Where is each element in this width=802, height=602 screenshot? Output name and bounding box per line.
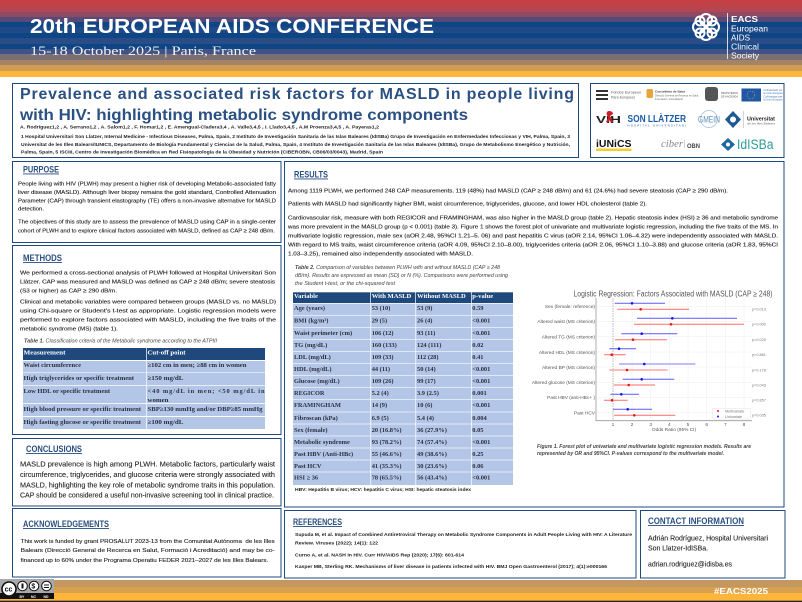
reference list: Kasper MB, Sterling RK. Mechanisms of liver disease in patients infected with HIV. BMJ Open Gastroenterol (2017); 4(1):e000166 [295,564,607,569]
p-values: p=0.013 [752,308,766,312]
methods text: metabolic syndrome (MS) (table 1). [20,326,118,332]
heading: conclusions: CONCLUSIONS [26,444,82,454]
table 2: comparison of variables: <0.001 [472,330,490,337]
x axis ticks and label: Odds Ratio (95% CI) [652,427,697,433]
table 2: comparison of variables: REGICOR [294,390,325,397]
table 1: metabolic syndrome criteria: High triglycerides or specific treatment [24,375,135,382]
table 2: comparison of variables: 106 (12) [372,330,394,337]
table 2: comparison of variables: 49 (38.6%) [417,451,447,458]
table 2: comparison of variables: 74 (57.4%) [417,439,447,446]
results text: 1.03–3.25), remained also independently associated with MASLD. [288,252,473,258]
conclusions text: MASLD prevalence is high among PLWH. Metabolic factors, particularly waist [20,460,275,468]
EACS society name: Society [731,50,760,60]
logo: Son Llatzer [628,112,687,128]
affiliations [21,134,570,154]
methods text: We performed a cross-sectional analysis of PLWH followed at Hospital Universitari Son [20,270,276,276]
table 1: metabolic syndrome criteria [23,348,265,429]
table 1 caption: Table 1. Classification criteria of the Metabolic syndrome according to the ATPIII [24,338,217,344]
poster title [19,86,574,124]
table 1: metabolic syndrome criteria: ≥100 mg/dL [148,419,184,426]
table 2: comparison of variables: <0.001 [472,439,490,446]
footer banner [0,579,802,602]
table 2: comparison of variables: With MASLD [372,293,412,300]
heading: purpose: PURPOSE [23,164,59,174]
logo: Ministerio de Hacienda: DE HACIENDA [721,94,738,98]
table 2: comparison of variables: 109 (33) [372,354,394,361]
table 2: comparison of variables: <0.001 [472,378,490,385]
icon: creative commons licence badge [0,579,54,599]
reference list: Curno A, et al. NASH in HIV. Curr HIV/AIDS Rep (2020); 17(6): 601-614 [295,552,464,558]
category labels: Altered waist (MS criterion) [537,319,595,325]
logo: Son Llatzer: SON LLÀTZER [628,112,687,125]
table 2: comparison of variables: Variable [294,293,318,300]
chart: forest plot of logistic regression [532,290,773,433]
table 2: comparison of variables: 53 (10) [372,305,390,312]
acknowledgements text: Balears (Direcció General de Recerca en Salut, Formació i Acreditació) and may be co- [21,548,275,554]
x axis ticks and label: 4 [668,422,671,428]
table 2: comparison of variables: Past HCV [294,463,322,470]
table 2: comparison of variables: 99 (17) [417,378,436,385]
table 2: comparison of variables: 93 (11) [417,330,435,337]
affiliations: Palma, Spain, 5 ISCIII, Centro de Investigación Biomédica en Red Fisiopatología de la Obesidad y Nutrición (CIBEROBN, CB06/03/0043), Madrid, Spain [21,149,383,154]
table 2: comparison of variables: 0.001 [472,390,487,397]
poster title: Prevalence and associated risk factors for MASLD in people living [20,86,574,103]
table 2: comparison of variables: 6.9 (5) [372,415,389,422]
logo: EU flag: Cofinanciado por [764,88,783,92]
purpose text: Parameter (CAP) through transient elastography (TE) offers a non-invasive alternative for MASLD [18,198,276,204]
table 2 caption: dB/m). Results are expressed as mean (SD) or N (%). Comparisons were performed using [295,273,509,279]
x axis ticks and label: 6 [705,422,708,428]
panel: acknowledgements [12,508,281,577]
logo: CIBER OBN: ciber [661,139,683,150]
table 1: metabolic syndrome criteria: women [148,397,169,404]
p-values: p=0.857 [752,398,766,402]
results text: Cardiovascular risk, measure with both REGICOR and FRAMINGHAM, was also higher in the MASLD group (table 2). Hepatic steatosis index (HSI) ≥ 36 and metabolic syndrome [288,216,779,222]
table 2: comparison of variables: Past HBV (Anti-HBc) [294,451,353,458]
chart legend: Univariate [725,415,742,419]
table 2: comparison of variables: 0.05 [472,427,483,434]
EACS society name [727,13,768,60]
EACS society name: EACS [731,14,758,24]
table 2: comparison of variables: 0.06 [472,463,484,470]
affiliations: 1 Hospital Universitari Son Llatzer, Internal Medicine - Infectious Diseases, Palma, Spain, 2 Instituto de Investigación Sanitaria de las Islas Baleares (IdISBa) Grupo de Investigación en Enfermedades Infecciosas y VIH, Palma, Spain, 3 [21,134,570,139]
table 2 caption: Table 2. Comparison of variables between PLWH with and without MASLD (CAP ≥ 248 [295,265,501,271]
contact text: Son Llatzer-IdISBa. [648,544,708,552]
purpose text: liver disease (MASLD). Although liver biopsy remains the gold standard, Controlled Attenuation [18,190,276,196]
table 2 caption: the Student t-test, or the chi-squared test [295,281,395,287]
results text: was more prevalent in the MASLD group (p < 0.001) (table 3). Figure 1 shows the forest plot of univariate and multivariate logistic regression, including the five traits of the MS. In [287,225,778,231]
authors: A. Rodríguez1,2 , A. Serrano1,2 , A. Salom1,2 , F. Homar1,2 , E. Amengual-Cladera3,4 , A. Valle3,4,5 , I. Llado3,4,5 , A.M Proenza3,4,5 , A. Payeras1,2 [20,124,379,130]
table 1: metabolic syndrome criteria: ≥102 cm in men; ≥88 cm in women [148,362,247,369]
table 1: metabolic syndrome criteria: <40 mg/dL in men; <50 mg/dL in [148,388,265,395]
icon: EACS knot logo [693,14,719,40]
panel: funder and institution logos [590,84,784,158]
logo: Universitat de les Illes Balears: Universitat [747,116,775,122]
x axis ticks and label: 1 [612,422,615,428]
chart legend: Multivariate [725,410,744,414]
logo: IdISBa: IdISBa [737,137,774,152]
category labels: Past HBV (anti-HBc+ ) [547,395,595,401]
table 2: comparison of variables: 5.2 (4) [372,390,389,397]
conference date and place: 15-18 October 2025 | Paris, France [30,43,256,58]
table 2: comparison of variables: 112 (28) [417,354,438,361]
table 2: comparison of variables: 0.004 [472,415,487,422]
purpose text: detection. [18,207,44,213]
p-values [752,308,766,418]
category labels: Altered BP (MS criterion) [542,365,595,371]
logo: Conselleria de Salut: Formació i Acreditació [655,97,683,101]
table 2: comparison of variables: 0.59 [472,305,483,312]
reference list: Supuda M, et al. Impact of Combined Antiretroviral Therapy on Metabolic Syndrome Components in Adult People Living with HIV: A Literature [295,532,632,537]
results text: With regard to MS traits, waist circumference criteria (aOR 4.09, 95%CI 2.10–8.00), triglycerides criteria (aOR 2.06, 95%CI 1.10–3.88) and glucose criteria (aOR 1.83, 95%CI [288,243,778,249]
table 1: metabolic syndrome criteria: High blood pressure or specific treatment [24,406,142,413]
table 2: comparison of variables: <0.001 [472,318,490,325]
logo: EU flag: la Unió Europea [764,98,783,102]
p-values: p=0.178 [752,368,766,372]
table 2: comparison of variables: p-value [472,293,493,300]
icon: creative commons licence badge: ND [44,595,49,599]
results text: multivariate logistic regression, male sex (aOR 2.48, 95%CI 1.21–5. 06) and past hepatitis C virus (aOR 2.14, 95%CI 1.06–4.32) were independently associated with MASLD. [288,234,778,240]
purpose text: People living with HIV (PLWH) may present a higher risk of developing Metabolic-associated fatty [18,181,276,187]
table 2: comparison of variables: 0.02 [472,342,483,349]
logo: iUNICS: iUNiCS [596,139,632,150]
logo: Conselleria de Salut: Conselleria de Salut [655,90,685,94]
univariate intervals [609,302,737,411]
table 2: comparison of variables: 78 (65.5%) [372,475,402,482]
purpose text: The objectives of this study are to assess the prevalence of MASLD using CAP in a single-center [18,220,276,226]
affiliations: Universitat de les Illes Balears/IUNICS, Departamento de Biología Fundamental y Ciencias de la Salud, Palma, Spain, 4 Instituto de Investigación Sanitaria de las Islas Baleares (IdISBa), Grupo de Metabolismo Energético y Nutrición, [21,142,570,147]
reference list: Review. Viruses (2022); 14(1): 122 [295,540,378,546]
table 2: comparison of variables: 56 (43.4%) [417,475,447,482]
logo: Universitat de les Illes Balears [725,111,776,128]
table 1: metabolic syndrome criteria: SBP≥130 mmHg and/or DBP≥85 mmHg [148,406,263,413]
x axis ticks and label: 5 [687,422,690,428]
logo: EU flag [742,88,783,102]
methods text [20,270,277,332]
category labels: Sex (female: reference) [545,304,595,310]
icon: creative commons licence badge: NC [31,595,36,599]
category labels: Altered glucose (MS criterion) [532,380,595,386]
logo: EU flag: la Unión Europea [764,91,783,95]
figure 1 caption: Figure 1. Forest plot of univariate and multivariate logistic regression models. Results are [537,444,751,450]
logo: VIH [596,111,621,126]
table 2: comparison of variables: Waist perimeter (cm) [294,330,352,337]
figure 1 caption [537,444,751,457]
acknowledgements text: financed up to 60% under the Programa Operatiu FEDER 2021–2027 de les Illes Balears. [21,558,269,564]
chart title: Logistic Regression: Factors Associated with MASLD (CAP ≥ 248) [574,290,773,298]
EACS society name: AIDS [731,32,750,42]
panel: contact information [640,510,785,578]
logo: Fondos Europeos [596,90,641,100]
p-values: p=0.881 [752,353,766,357]
logo: Fondos Europeos: Para Europeos [611,96,635,100]
category labels: Altered HDL (MS criterion) [539,350,595,356]
logo: Conselleria de Salut [646,89,699,101]
table 2 caption [295,265,509,287]
contact text [648,534,768,568]
table 2: comparison of variables: 0.25 [472,451,483,458]
logo: Fondos Europeos: Fondos Europeos [611,90,641,94]
figure 1 caption: represented by OR and 95%CI. P-values correspond to the multivariate model. [537,451,724,457]
p-values: p=0.025 [752,338,766,342]
logo: CIBER OBN: OBN [687,143,700,150]
table 2: comparison of variables: 41 (35.3%) [372,463,402,470]
x axis ticks and label: 8 [743,422,746,428]
table 2: comparison of variables: 53 (9) [417,305,432,312]
category labels: Past HCV [574,410,596,416]
methods text: Llàtzer. CAP was measured and MASLD was defined as CAP ≥ 248 dB/m; severe steatosis [20,279,275,285]
table 2: comparison of variables [293,292,513,485]
logo: CIBER OBN [661,139,700,150]
methods text: using Chi-square or Student's t-test as appropriate. Logistic regression models were [20,308,277,314]
table 2: comparison of variables: 20 (16.8%) [372,427,402,434]
methods text: performed to explore factors associated with MASLD, including the five traits of the [20,317,277,323]
x axis ticks and label [612,422,746,433]
table 1: metabolic syndrome criteria: Cut-off point [148,350,186,356]
table 2: comparison of variables: Glucose (mg/dL) [294,378,340,385]
table 2: comparison of variables: Sex (female) [294,427,328,434]
x axis ticks and label: 2 [631,422,634,428]
icon: creative commons licence badge: $ [31,584,35,590]
category labels: Altered TG (MS criterion) [542,334,595,340]
conclusions text: CAP should be considered a useful non-invasive screening tool in clinical practice. [20,490,274,499]
conference title: 20th EUROPEAN AIDS CONFERENCE [30,16,434,38]
table 2: comparison of variables: 44 (11) [372,366,390,373]
panel: conclusions [12,438,281,506]
acknowledgements text: This work is funded by grant PROSALUT 2023-13 from the Comunitat Autònoma de les Illes [21,539,275,545]
logo: Ministerio de Hacienda: MINISTERIO [721,91,739,95]
logo: IdISBa [721,137,774,152]
table 2: comparison of variables: 3.9 (2.5) [417,390,439,397]
logo: EU flag: Cofinançat per [764,94,783,98]
table 2: comparison of variables: 30 (23.6%) [417,463,447,470]
x axis ticks and label: 7 [724,422,727,428]
table 2: comparison of variables: 50 (14) [417,366,436,373]
logo: VIH: VIH [596,115,621,126]
methods text: (S3 or higher) as CAP ≥ 290 dB/m. [20,288,117,294]
panel: purpose [12,162,281,242]
table 1: metabolic syndrome criteria: ≥150 mg/dL [148,375,184,382]
table 2: comparison of variables: Fibroscan (kPa) [294,415,338,422]
table 2: comparison of variables: 26 (4) [417,318,432,325]
purpose text [18,181,276,234]
table 2: comparison of variables: 109 (26) [372,378,394,385]
heading: contact information: CONTACT INFORMATION [648,516,744,526]
panel: title block [12,84,578,158]
multivariate intervals [604,308,744,417]
p-values: p=0.000 [752,322,766,326]
heading: results: RESULTS [294,170,328,180]
table 2: comparison of variables: HDL (mg/dL) [294,366,331,373]
conclusions text [20,460,275,499]
table 2: comparison of variables: 5.4 (4) [417,415,434,422]
hashtag: #EACS2025 [714,587,769,596]
acknowledgements text [21,539,275,564]
table 2: comparison of variables: Metabolic syndrome [294,439,350,446]
results text: Among 1119 PLWH, we performed 248 CAP measurements. 119 (48%) had MASLD (CAP ≥ 248 dB/m) and 61 (24.6%) had severe steatosis (CAP ≥ 290 dB/m). [288,189,728,195]
panel: methods [12,246,281,434]
results text: Patients with MASLD had significantly higher BMI, waist circumference, triglycerides, glucose, and lower HDL cholesterol (table 2). [288,201,647,207]
heading: references: REFERENCES [293,517,342,527]
p-values: p=0.035 [752,414,766,418]
logo: Son Llatzer: HOSPITAL UNIVERSITARI [628,124,686,128]
EACS society name: European [731,24,768,34]
logo: Conselleria de Salut: Direcció General de Recerca en Salut, [655,94,699,98]
table 2: comparison of variables: 55 (46.6%) [372,451,402,458]
reference list [295,532,632,569]
chart legend [712,408,750,419]
category labels [532,304,596,416]
logo: GMEIN: GMEIN [698,114,720,124]
panel: references [284,510,636,578]
panel: results [284,162,784,507]
table 2 footnote: HBV: Hepatitis B virus; HCV: hepatitis C virus; HSI: hepatic steatosis index [295,487,471,492]
conclusions text: MASLD, highlighting the key role of metabolic syndrome traits in this population. [20,480,275,489]
table 2: comparison of variables: 124 (111) [417,342,441,349]
EACS society name: Clinical [731,42,759,52]
table 2: comparison of variables: <0.001 [472,366,490,373]
table 2: comparison of variables: 29 (5) [372,318,387,325]
contact text: Adrián Rodríguez, Hospital Universitari [648,534,768,542]
p-values: p=0.043 [752,383,766,387]
conclusions text: circumference, triglycerides, and glucose criteria were strongly associated with [20,470,275,479]
table 2: comparison of variables: TG (mg/dL) [294,342,327,349]
table 2: comparison of variables: HSI ≥ 36 [294,475,319,482]
contact text: adrian.rodriguez@idisba.es [648,560,732,568]
table 2: comparison of variables: 10 (6) [417,402,432,409]
logo: GMEIN [698,110,720,128]
table 2: comparison of variables: Age (years) [294,305,325,312]
table 1: metabolic syndrome criteria: High fasting glucose or specific treatment [24,419,142,426]
table 1: metabolic syndrome criteria: Low HDL or specific treatment [24,388,111,395]
heading: acknowledgements: ACKNOWLEDGEMENTS [23,519,109,529]
table 2: comparison of variables: <0.001 [472,402,490,409]
table 2: comparison of variables: 93 (78.2%) [372,439,402,446]
logo: Universitat de les Illes Balears: de les Illes Balears [747,122,776,126]
table 2: comparison of variables: 160 (133) [372,342,397,349]
table 2: comparison of variables: LDL (mg/dL) [294,354,331,361]
table 2: comparison of variables: 0.41 [472,354,483,361]
poster title: with HIV: highlighting metabolic syndrome components [19,107,468,124]
icon: creative commons licence badge: BY [20,595,25,599]
purpose text: cohort of PLWH and to explore clinical factors associated with MASLD, defined as CAP ≥ 248 dB/m. [18,228,275,234]
methods text: Clinical and metabolic variables were compared between groups (MASLD vs. no MASLD) [20,300,276,306]
table 1: metabolic syndrome criteria: Measurement [24,350,66,356]
table 2: comparison of variables: BMI (kg/m²) [294,318,328,325]
results text [287,189,779,258]
table 2: comparison of variables: <0.001 [472,475,490,482]
table 1: metabolic syndrome criteria: Waist circumference [24,362,81,369]
header banner [0,0,802,77]
x axis ticks and label: 3 [649,422,652,428]
icon: creative commons licence badge: cc [5,586,12,594]
logo: Ministerio de Hacienda [705,87,739,101]
table 2: comparison of variables: 14 (9) [372,402,387,409]
heading: methods: METHODS [23,253,62,263]
table 2: comparison of variables: Without MASLD [417,293,466,300]
table 2: comparison of variables: FRAMINGHAM [294,402,341,409]
table 2: comparison of variables: 36 (27.9%) [417,427,447,434]
